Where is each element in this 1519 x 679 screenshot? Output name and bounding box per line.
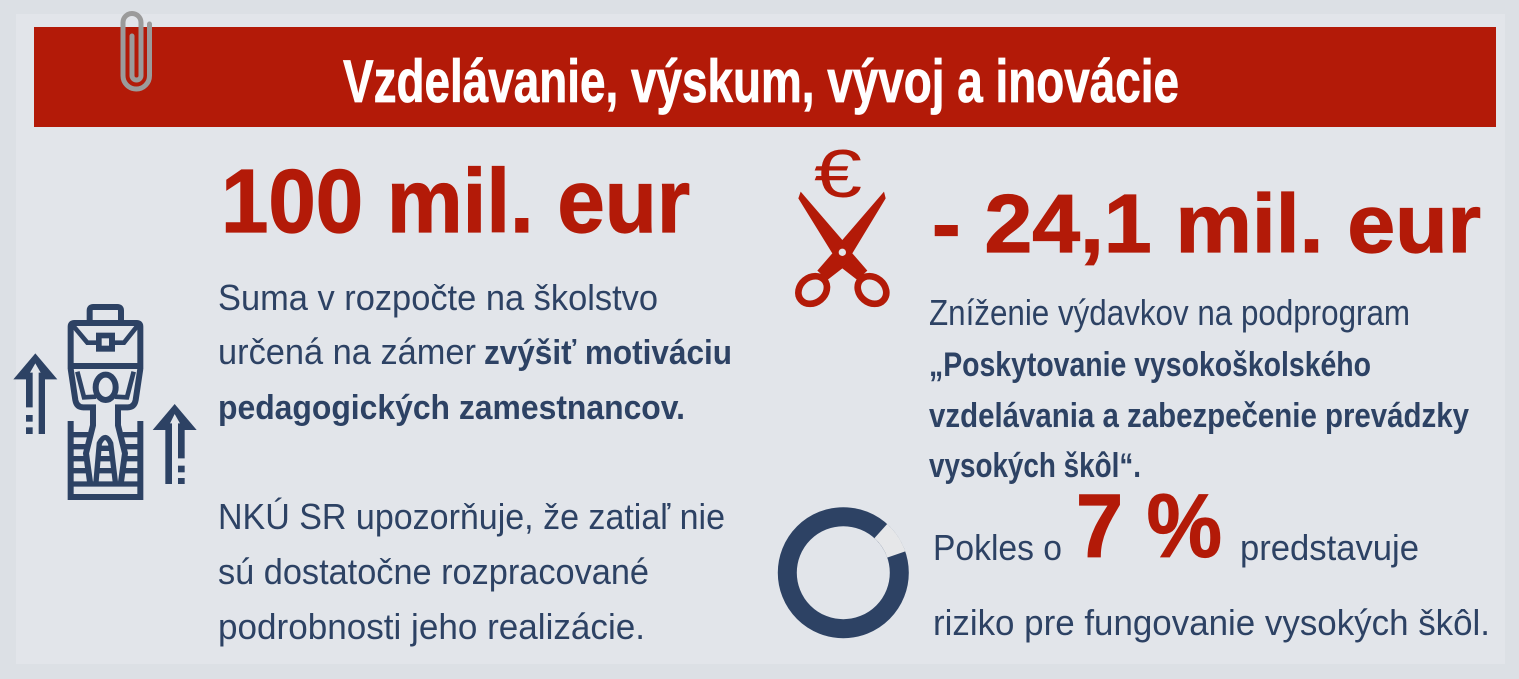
- stat: 7 %: 7 %: [1076, 477, 1222, 577]
- text block: NKÚ warning: sú dostatočne rozpracované: [218, 551, 649, 592]
- text block: budget purpose: Suma v rozpočte na školstvo: [218, 277, 658, 318]
- text block: budget purpose: [218, 277, 732, 427]
- chart: donut 7 percent: [787, 517, 899, 629]
- person: [71, 369, 140, 482]
- text block: spending reduction: „Poskytovanie vysokoškolského: [929, 346, 1371, 384]
- title: Vzdelávanie, výskum, vývoj a inovácie: [343, 48, 1179, 115]
- title banner: [34, 27, 1496, 127]
- arrow left: [13, 353, 57, 434]
- text block: 7 percent decline: riziko pre fungovanie vysokých škôl.: [933, 602, 1490, 643]
- heading: 100 mil. eur: 100 mil. eur: [221, 152, 690, 252]
- icon: worker lifting briefcase with up arrows: [13, 307, 197, 497]
- left column: amount and description: [218, 152, 732, 647]
- text block: 7 percent decline: [933, 477, 1490, 643]
- text block: budget purpose: určená na zámer: [218, 331, 476, 372]
- text block: 7 percent decline: Pokles o: [933, 527, 1062, 568]
- text block: budget purpose: zvýšiť motiváciu: [484, 334, 732, 372]
- text block: budget purpose: pedagogických zamestnancov.: [218, 389, 685, 427]
- text block: spending reduction: vysokých škôl“.: [929, 447, 1141, 485]
- briefcase: [71, 307, 140, 366]
- text block: NKÚ warning: podrobnosti jeho realizácie.: [218, 606, 645, 647]
- arrow right: [153, 404, 197, 484]
- icon: scissors: [793, 192, 892, 310]
- text block: NKÚ warning: [218, 496, 725, 647]
- text block: 7 percent decline: predstavuje: [1240, 527, 1419, 568]
- ladder: [71, 421, 140, 497]
- text block: NKÚ warning: NKÚ SR upozorňuje, že zatiaľ nie: [218, 496, 725, 537]
- icon: paperclip: [123, 14, 150, 89]
- text block: spending reduction: [929, 292, 1469, 485]
- text block: spending reduction: Zníženie výdavkov na podprogram: [929, 292, 1410, 333]
- heading: - 24,1 mil. eur: - 24,1 mil. eur: [932, 177, 1481, 270]
- icon: euro sign: €: [814, 136, 862, 212]
- right column: cut and description: [929, 177, 1490, 643]
